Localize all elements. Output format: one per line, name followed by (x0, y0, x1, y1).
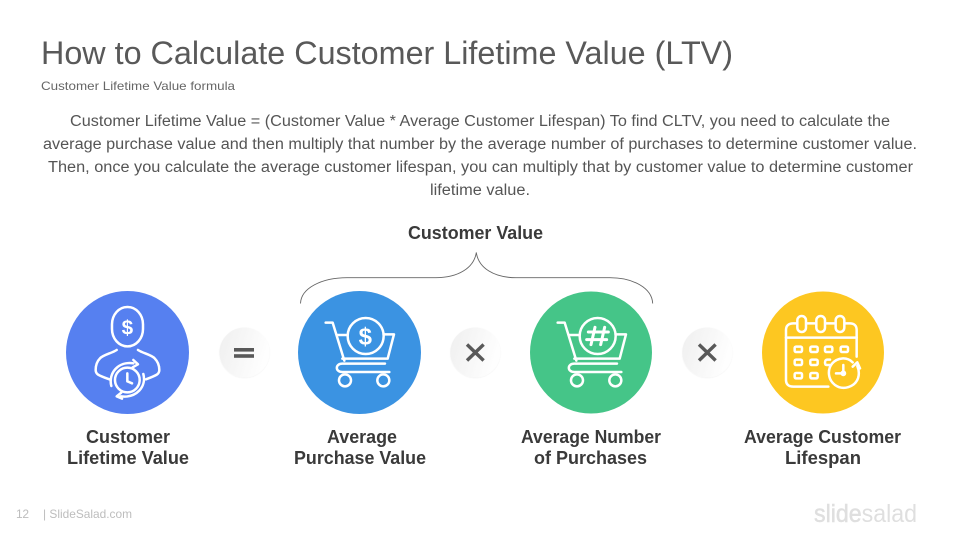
label: customer lifetime value (67, 427, 189, 468)
label: average customer lifespan: Lifespan (785, 448, 861, 468)
label: average number of purchases: of Purchases (534, 448, 647, 468)
label: average customer lifespan (744, 427, 901, 468)
footer site name: | SlideSalad.com (43, 507, 132, 521)
description text (43, 113, 917, 199)
description text: Then, once you calculate the average customer lifespan, you can multiply that by customer value to determine customer (48, 159, 913, 176)
title: How to Calculate Customer Lifetime Value (LTV) (41, 35, 733, 71)
icon: calendar with clock (786, 316, 860, 388)
icon: cart with hash (558, 318, 626, 386)
icon: cart with dollar: $ (359, 324, 372, 351)
description text: lifetime value. (430, 182, 530, 199)
circle icon: average customer lifespan (762, 292, 884, 414)
brace (300, 252, 653, 304)
circle icon: average number of purchases (530, 292, 652, 414)
operator: times (682, 328, 732, 378)
circle icon: average purchase value (298, 291, 421, 414)
label: average customer lifespan: Average Customer (744, 427, 901, 447)
label: customer lifetime value: Customer (86, 427, 170, 447)
label: average purchase value (294, 427, 426, 468)
label: average purchase value: Average (327, 427, 397, 447)
circle icon: customer lifetime value (66, 291, 189, 414)
label: average number of purchases: Average Number (521, 427, 661, 447)
label: customer lifetime value: Lifetime Value (67, 448, 189, 468)
heading: customer value: Customer Value (408, 223, 543, 243)
operator: times (450, 328, 500, 378)
description text: average purchase value and then multiply that number by the average number of purchases to determine customer value. (43, 136, 917, 153)
label: average number of purchases (521, 427, 661, 468)
icon: person with dollar head and clock: $ (122, 317, 134, 340)
label: average purchase value: Purchase Value (294, 448, 426, 468)
page number: 12 (16, 507, 29, 521)
subtitle: Customer Lifetime Value formula (41, 79, 235, 93)
operator: equals (220, 328, 270, 378)
footer logo: slidesalad (814, 500, 917, 528)
description text: Customer Lifetime Value = (Customer Value * Average Customer Lifespan) To find CLTV, you need to calculate the (70, 113, 890, 130)
